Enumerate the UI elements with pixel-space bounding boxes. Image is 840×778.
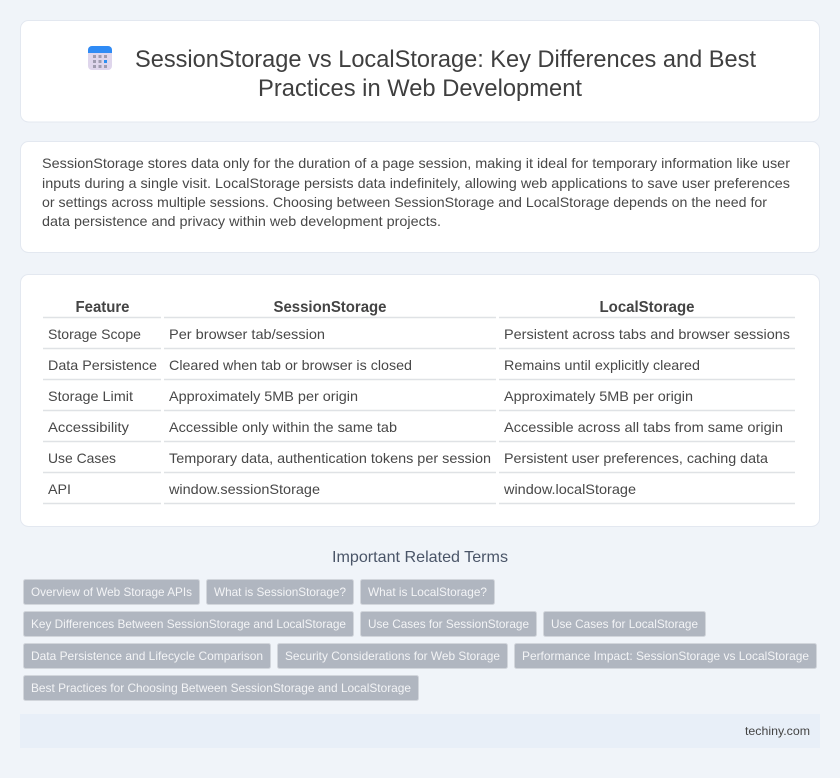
row: accessibility: Accessible only within the same tab bbox=[169, 419, 397, 435]
tag: Data Persistence and Lifecycle Comparison bbox=[31, 649, 263, 663]
row: use cases bbox=[48, 450, 768, 466]
tag bbox=[514, 644, 816, 668]
text block: description: SessionStorage stores data only for the duration of a page session, making it ideal for temporary information like user bbox=[42, 155, 790, 171]
row: storage scope: Storage Scope bbox=[48, 326, 141, 342]
row: accessibility: Accessible across all tabs from same origin bbox=[504, 419, 783, 435]
row: storage limit: Approximately 5MB per origin bbox=[504, 388, 693, 404]
row: storage scope bbox=[48, 326, 790, 342]
tag bbox=[24, 676, 418, 700]
row: api: window.localStorage bbox=[503, 481, 636, 497]
tag bbox=[544, 612, 706, 636]
panel: description bbox=[20, 142, 820, 252]
row: api: API bbox=[48, 481, 71, 497]
row: data persistence: Data Persistence bbox=[48, 357, 157, 373]
tag: Use Cases for SessionStorage bbox=[368, 617, 529, 631]
table header: Feature bbox=[76, 299, 130, 316]
text block: description: or settings across multiple sessions. Choosing between SessionStorage and LocalStorage depends on the need for bbox=[42, 194, 767, 210]
row: use cases: Temporary data, authentication tokens per session bbox=[169, 450, 491, 466]
table header bbox=[76, 299, 695, 316]
panel: header bbox=[20, 20, 820, 122]
row: storage scope: Persistent across tabs and browser sessions bbox=[504, 326, 790, 342]
tags: related terms bbox=[24, 580, 816, 700]
text block: description: data persistence and privacy within web development projects. bbox=[42, 213, 441, 229]
panel: comparison table bbox=[20, 274, 820, 526]
text block: description: inputs during a single visit. LocalStorage persists data indefinitely, allowing web applications to save user preferences bbox=[42, 175, 790, 191]
footer: techiny.com bbox=[745, 724, 810, 738]
title: Practices in Web Development bbox=[258, 75, 582, 102]
tag bbox=[360, 580, 494, 604]
row: storage limit bbox=[48, 388, 693, 404]
row: api bbox=[48, 481, 636, 497]
footer bbox=[20, 714, 820, 748]
row: api: window.sessionStorage bbox=[168, 481, 320, 497]
row: data persistence: Cleared when tab or browser is closed bbox=[169, 357, 412, 373]
text block: description bbox=[42, 155, 790, 229]
row: accessibility: Accessibility bbox=[48, 419, 129, 435]
tag: What is SessionStorage? bbox=[214, 585, 346, 599]
tag bbox=[24, 580, 200, 604]
title bbox=[135, 46, 756, 102]
tag bbox=[278, 644, 508, 668]
tag: Overview of Web Storage APIs bbox=[31, 585, 192, 599]
tag bbox=[24, 612, 354, 636]
tag: Best Practices for Choosing Between SessionStorage and LocalStorage bbox=[31, 681, 411, 695]
tag: Use Cases for LocalStorage bbox=[551, 617, 698, 631]
row: use cases: Persistent user preferences, caching data bbox=[504, 450, 768, 466]
row: storage limit: Approximately 5MB per origin bbox=[169, 388, 358, 404]
tag: What is LocalStorage? bbox=[368, 585, 487, 599]
tag: Performance Impact: SessionStorage vs LocalStorage bbox=[522, 649, 809, 663]
row: storage scope: Per browser tab/session bbox=[169, 326, 325, 342]
row: use cases: Use Cases bbox=[48, 450, 116, 466]
row: storage limit: Storage Limit bbox=[48, 388, 133, 404]
tag: Key Differences Between SessionStorage and LocalStorage bbox=[31, 617, 346, 631]
tag bbox=[206, 580, 354, 604]
heading: related terms: Important Related Terms bbox=[332, 549, 508, 566]
row: data persistence: Remains until explicitly cleared bbox=[504, 357, 700, 373]
tag bbox=[360, 612, 536, 636]
tag: Security Considerations for Web Storage bbox=[285, 649, 500, 663]
title: SessionStorage vs LocalStorage: Key Differences and Best bbox=[135, 46, 756, 73]
icon: calendar bbox=[88, 46, 112, 70]
row: accessibility bbox=[48, 419, 783, 435]
table header: LocalStorage bbox=[600, 299, 695, 316]
table header: SessionStorage bbox=[274, 299, 387, 316]
tag bbox=[24, 644, 270, 668]
row: data persistence bbox=[48, 357, 700, 373]
